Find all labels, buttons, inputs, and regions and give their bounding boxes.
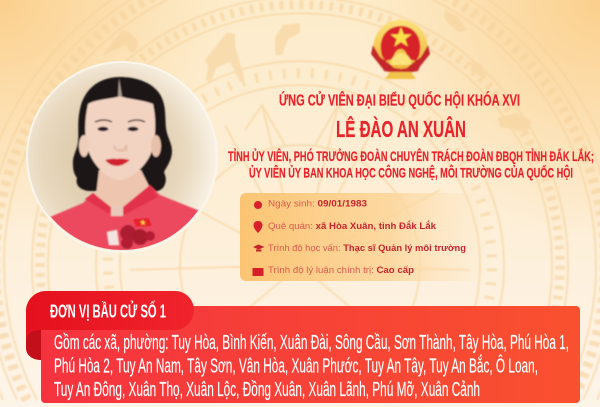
panel: personal details xyxy=(240,193,490,281)
icon: national emblem xyxy=(371,20,430,79)
detail: political theory: Trình độ lý luận chính trị: Cao cấp xyxy=(268,265,414,276)
heading block xyxy=(228,92,594,180)
heading: electoral unit: ĐƠN VỊ BẦU CỬ SỐ 1 xyxy=(50,300,166,322)
portrait xyxy=(26,61,218,253)
panel body xyxy=(41,306,580,403)
detail: date of birth: Ngày sinh: 09/01/1983 xyxy=(268,198,367,210)
panel: electoral unit xyxy=(26,291,580,403)
detail: home town: Quê quán: xã Hòa Xuân, tỉnh Đắk Lắk xyxy=(268,220,437,232)
icon: graduation cap xyxy=(253,244,264,252)
tab fold xyxy=(26,312,41,360)
tab xyxy=(26,291,194,342)
heading: candidate name: LÊ ĐÀO AN XUÂN xyxy=(336,115,466,142)
detail: education: Trình độ học vấn: Thạc sĩ Quản lý môi trường xyxy=(268,243,466,254)
icon: flag xyxy=(252,268,264,276)
portrait halo xyxy=(27,62,217,252)
icon: location pin xyxy=(254,221,262,233)
portrait photo xyxy=(50,76,198,250)
icon: birthday xyxy=(254,201,262,209)
text: communes list xyxy=(54,332,569,401)
